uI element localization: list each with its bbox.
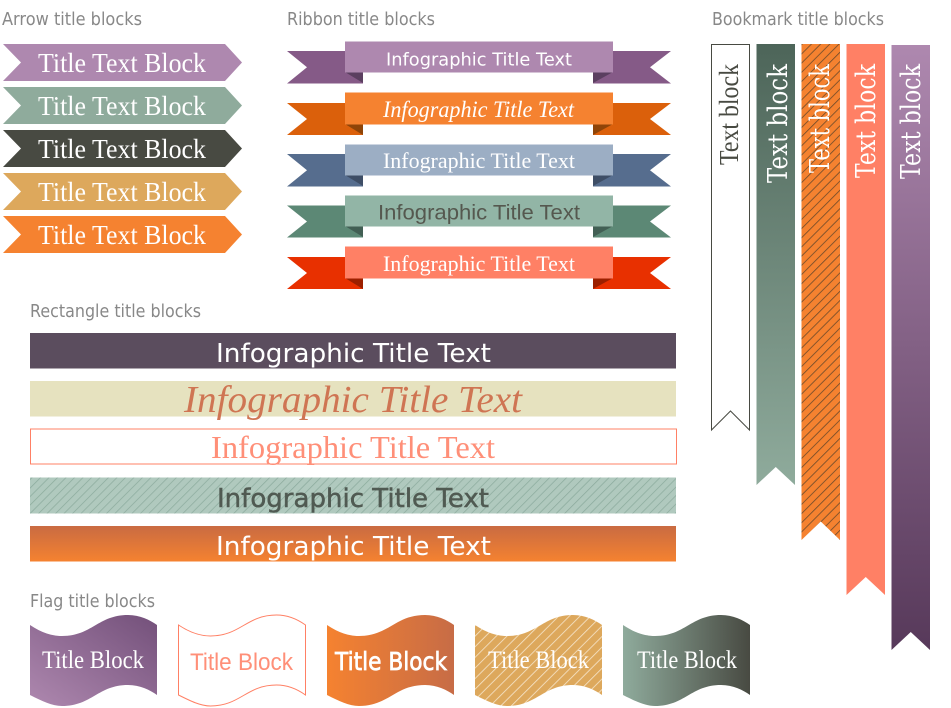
flag: tan hatched: [475, 615, 602, 706]
bookmark: green gradient: [756, 44, 795, 485]
ribbon: coral: Infographic Title Text: [383, 251, 576, 276]
arrow block: dark: [3, 130, 242, 167]
bookmark: white outline: Text block: [714, 64, 744, 165]
heading: ribbon title blocks: Ribbon title blocks: [287, 9, 435, 30]
ribbon: purple: Infographic Title Text: [386, 50, 572, 70]
arrow block: tan: Title Text Block: [38, 177, 206, 207]
arrow block: green: Title Text Block: [38, 91, 206, 121]
rectangle: orange gradient: Infographic Title Text: [216, 532, 491, 562]
bookmark: coral: [846, 44, 885, 595]
arrow block: purple: [3, 44, 242, 81]
arrow block: green: [3, 87, 242, 124]
bookmark: white outline: [712, 44, 750, 430]
flag: purple gradient: [30, 615, 157, 706]
arrow block: dark: Title Text Block: [38, 134, 206, 164]
arrow block: purple: Title Text Block: [38, 48, 206, 78]
ribbon: purple: [287, 42, 671, 84]
rectangle: green hatched: Infographic Title Text: [217, 484, 489, 514]
heading: flag title blocks: Flag title blocks: [30, 591, 155, 612]
bookmark: purple gradient: Text block: [896, 63, 927, 179]
flag: green-dark gradient: [623, 615, 750, 706]
heading: arrow title blocks: Arrow title blocks: [2, 9, 142, 30]
rectangle: green hatched: [30, 478, 676, 514]
flag: orange gradient: [327, 615, 454, 706]
panel: rectangle title blocks: [30, 333, 676, 562]
heading: rectangle title blocks: Rectangle title blocks: [30, 301, 201, 322]
rectangle: cream: [30, 379, 676, 421]
panel: ribbon title blocks: [287, 42, 671, 289]
panel: arrow title blocks: [3, 44, 242, 253]
bookmark: coral: Text block: [851, 63, 882, 178]
bookmark: purple gradient: [892, 45, 930, 650]
flag: purple gradient: Title Block: [42, 647, 144, 674]
flag: coral outline: [178, 615, 306, 706]
flag: orange gradient: Title Block: [334, 647, 448, 676]
ribbon: green: Infographic Title Text: [378, 200, 580, 224]
ribbon: orange: [287, 92, 671, 135]
arrow block: orange: [3, 216, 242, 253]
bookmark: orange hatched: [802, 44, 840, 540]
arrow block: orange: Title Text Block: [38, 220, 206, 250]
ribbon: blue: Infographic Title Text: [383, 148, 576, 173]
arrow block: tan: [3, 173, 242, 210]
rectangle: dark plum: [30, 333, 676, 369]
ribbon: coral: [287, 246, 671, 289]
ribbon: green: [287, 196, 671, 238]
heading: bookmark title blocks: Bookmark title blocks: [712, 9, 884, 30]
rectangle: coral outline: Infographic Title Text: [211, 429, 495, 465]
rectangle: coral outline: [30, 429, 676, 465]
panel: flag title blocks: [30, 615, 750, 706]
rectangle: orange gradient: [30, 526, 676, 562]
ribbon: blue: [287, 144, 671, 186]
rectangle: cream: Infographic Title Text: [183, 379, 523, 421]
flag: coral outline: Title Block: [190, 649, 294, 676]
rectangle: dark plum: Infographic Title Text: [216, 339, 491, 369]
flag: green-dark gradient: Title Block: [637, 647, 737, 674]
bookmark: green gradient: Text block: [763, 63, 794, 183]
flag: tan hatched: Title Block: [488, 647, 589, 674]
ribbon: orange: Infographic Title Text: [382, 97, 575, 122]
panel: bookmark title blocks: [712, 44, 930, 650]
bookmark: orange hatched: Text block: [805, 64, 836, 173]
